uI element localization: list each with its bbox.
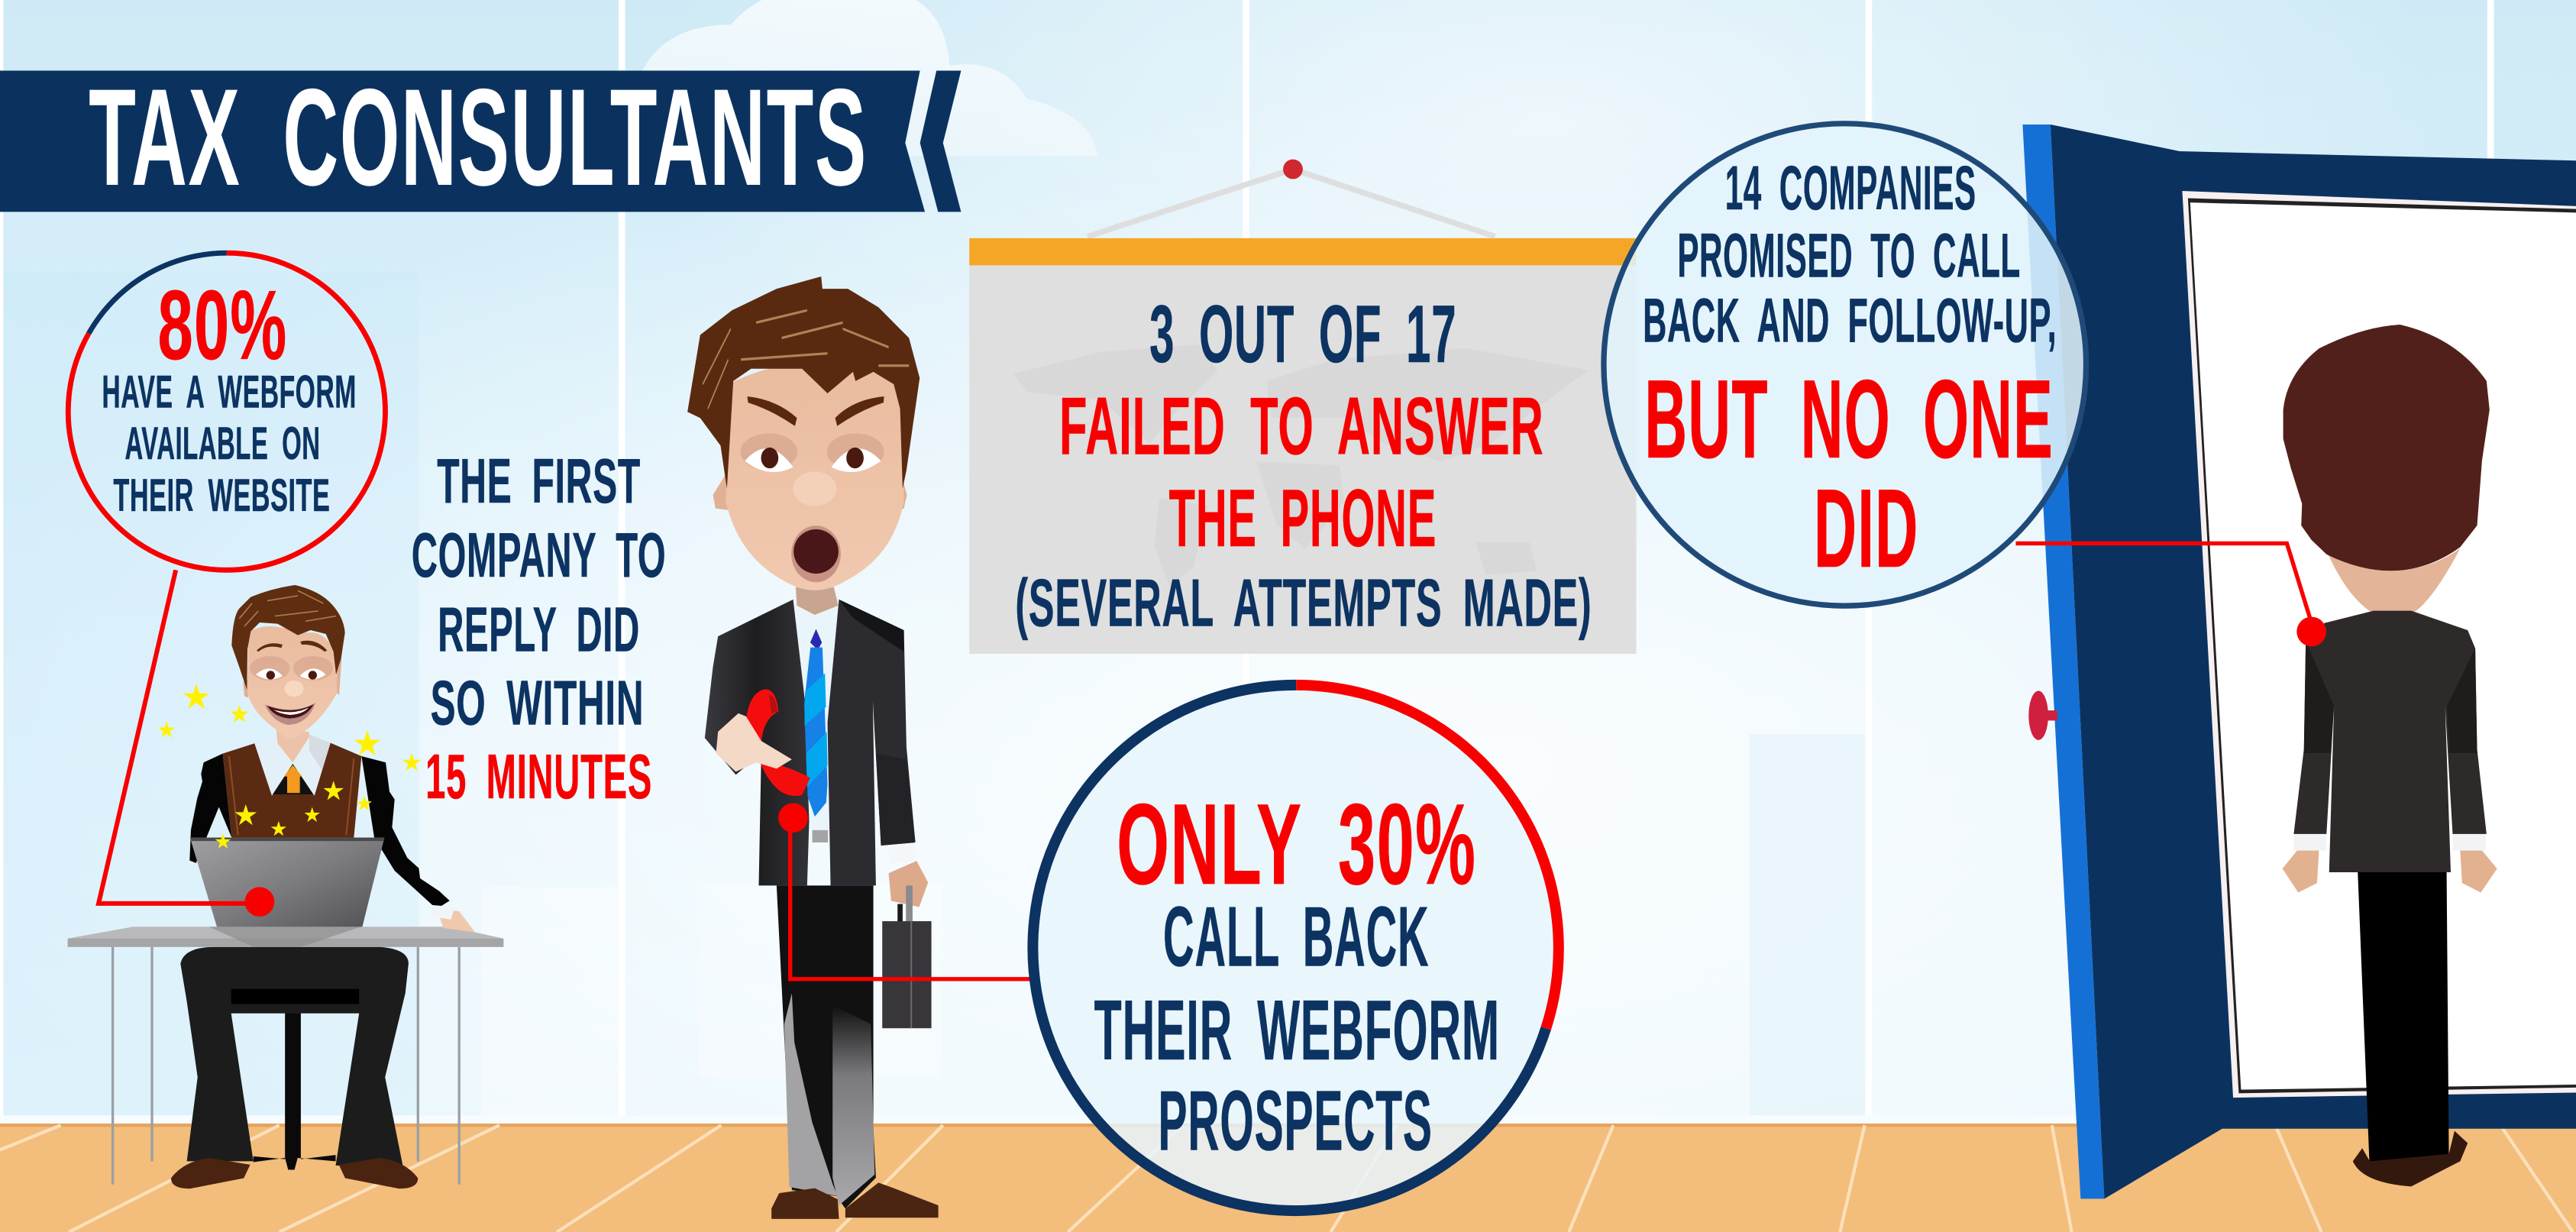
eye sockets (250, 656, 289, 681)
seated man: upper body and head (189, 585, 450, 909)
hanging sign (969, 160, 1637, 654)
panel: only 30% callout: PROSPECTS (1159, 1072, 1433, 1168)
wooden floor (0, 1124, 2576, 1232)
standing man with phone (687, 276, 939, 1219)
panel: only 30% callout: THEIR WEBFORM (1094, 982, 1500, 1078)
shoes (771, 1188, 839, 1219)
laptop and desk top (68, 838, 503, 947)
door leaf (2051, 124, 2576, 1199)
connector: webform callout to laptop (99, 570, 274, 917)
cuffs (2293, 833, 2486, 851)
eyes (256, 668, 326, 680)
mouth (265, 703, 315, 725)
cuff (887, 842, 916, 864)
jacket right (828, 600, 916, 885)
hanging sign: THE PHONE (1169, 473, 1437, 564)
door edge (2022, 124, 2104, 1199)
hair (231, 585, 345, 690)
right sleeve (361, 756, 450, 909)
hanging sign: 3 OUT OF 17 (1149, 289, 1456, 380)
hands (2283, 849, 2319, 892)
eyes (745, 448, 793, 472)
text block: first company to reply (412, 445, 666, 812)
panel: only 30% callout: ONLY 30% (1117, 780, 1476, 908)
text block: first company to reply: THE FIRST (437, 445, 641, 516)
brows (748, 396, 797, 426)
panel: 80% webform callout: HAVE A WEBFORM (102, 365, 357, 417)
text block: first company to reply: REPLY DID (438, 594, 640, 665)
desk legs (113, 947, 459, 1185)
panel: 80% webform callout: AVAILABLE ON (124, 417, 320, 469)
panel: 14 companies callout: DID (1814, 466, 1919, 590)
jacket left (705, 600, 810, 885)
panel: 14 companies callout (1604, 124, 2086, 606)
text block: first company to reply: COMPANY TO (412, 519, 666, 590)
hair (687, 276, 920, 489)
panel: 14 companies callout: BACK AND FOLLOW-UP, (1643, 286, 2057, 355)
stars (158, 684, 421, 849)
nose (793, 471, 836, 506)
desk top (68, 926, 503, 947)
tie (284, 765, 302, 793)
vest (223, 743, 361, 838)
hand with briefcase (889, 861, 928, 907)
panel: 14 companies callout: BUT NO ONE (1644, 357, 2054, 481)
text block: first company to reply: 15 MINUTES (425, 741, 652, 812)
phone (746, 689, 810, 796)
panel: 14 companies callout: PROMISED TO CALL (1677, 221, 2021, 290)
panel: only 30% callout: CALL BACK (1163, 889, 1429, 985)
nose (284, 681, 304, 697)
neck (796, 587, 839, 615)
world map watermark (1013, 344, 1588, 586)
face (726, 363, 904, 590)
ears (243, 658, 341, 697)
shoes (171, 1158, 250, 1188)
panel: 80% webform callout (68, 253, 385, 570)
neck (2326, 548, 2460, 613)
brows (257, 641, 327, 652)
mouth (791, 525, 841, 582)
ears (713, 470, 907, 510)
connector: 30% callout to phone man (790, 821, 1039, 979)
title banner (0, 70, 961, 212)
jacket (2293, 611, 2487, 872)
hand with phone (716, 713, 792, 771)
hanging sign: (SEVERAL ATTEMPTS MADE) (1015, 564, 1592, 640)
title: TAX CONSULTANTS (89, 60, 868, 215)
left sleeve (189, 754, 231, 863)
briefcase (882, 885, 932, 1028)
shirt (793, 597, 839, 830)
seated man: lower body and desk (113, 947, 459, 1188)
trousers (777, 885, 876, 1208)
face (247, 626, 338, 739)
connector: no one did callout to man (2015, 543, 2326, 646)
hanging sign: FAILED TO ANSWER (1059, 381, 1544, 472)
connector dot (778, 803, 808, 833)
hair (2283, 325, 2490, 571)
man from behind (2283, 325, 2497, 1186)
open door (2022, 124, 2576, 1199)
door handle (2038, 710, 2057, 721)
stool (254, 1004, 336, 1169)
panel: 80% webform callout: THEIR WEBSITE (113, 469, 330, 521)
tie shadow (273, 762, 313, 794)
banner chevron (920, 70, 961, 212)
eye sockets (741, 433, 797, 470)
text block: first company to reply: SO WITHIN (431, 667, 644, 738)
neck (276, 728, 309, 762)
trousers (180, 947, 409, 1166)
panel: 80% webform callout: 80% (158, 270, 287, 380)
panel: 14 companies callout: 14 COMPANIES (1725, 154, 1976, 223)
hand (437, 909, 475, 932)
door panel (2182, 191, 2576, 1098)
trousers (2358, 872, 2449, 1172)
tie (804, 629, 828, 816)
shoes (2353, 1131, 2468, 1186)
panel: only 30% callout (1033, 685, 1559, 1211)
collar (254, 735, 331, 796)
